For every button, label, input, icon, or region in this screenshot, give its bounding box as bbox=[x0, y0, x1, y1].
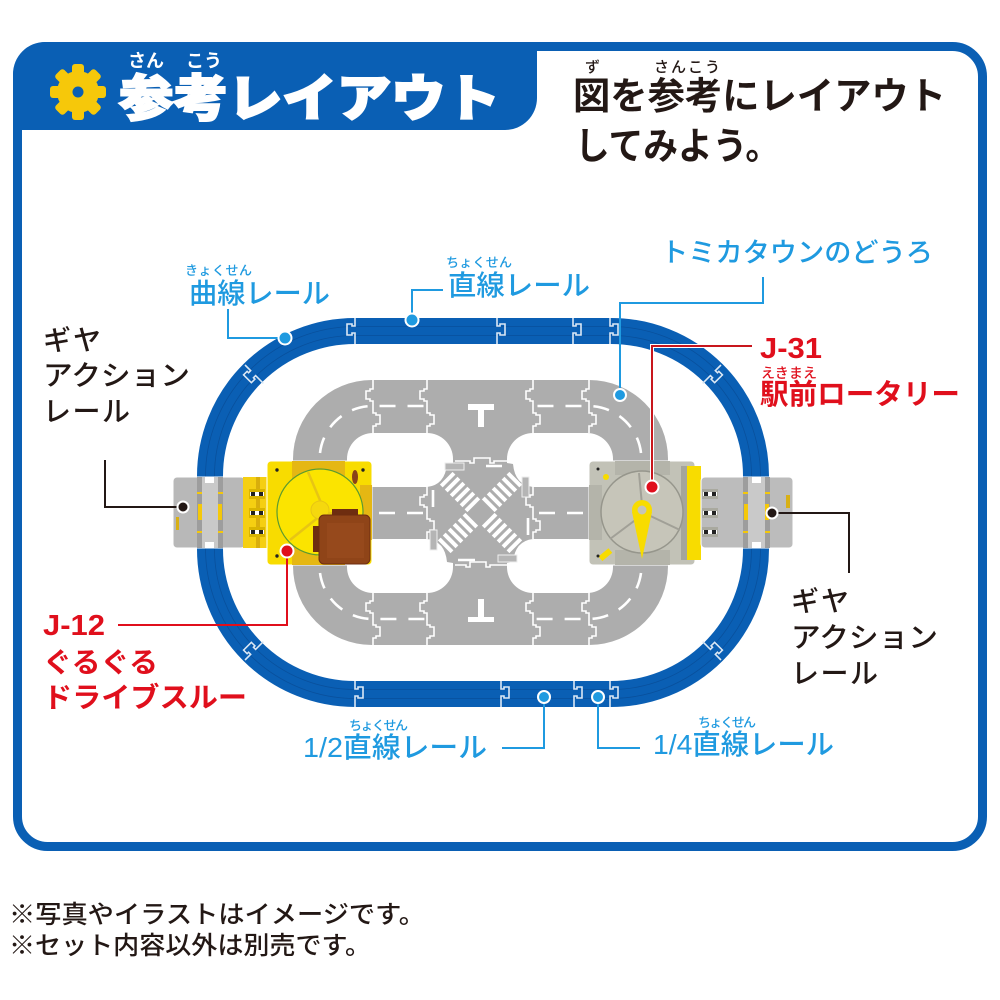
heading ruby bbox=[128, 51, 222, 71]
road seams bbox=[366, 380, 596, 645]
callout: half straight rail bbox=[303, 691, 550, 763]
callout: J-12: ドライブスルー bbox=[43, 681, 247, 713]
intro text: してみよう。 bbox=[575, 125, 780, 167]
intro text: ず bbox=[585, 59, 600, 76]
callout: straight rail: 直線レール bbox=[448, 270, 590, 301]
callout: left gear action rail: アクション bbox=[43, 360, 190, 391]
callout: J-31: 駅前ロータリー bbox=[760, 379, 960, 411]
panel frame bbox=[18, 46, 982, 846]
crosswalks bbox=[438, 472, 522, 553]
left gear action rail bbox=[173, 477, 271, 548]
footnotes: ※写真やイラストはイメージです。 bbox=[9, 901, 425, 929]
callout: straight rail bbox=[406, 255, 590, 326]
callout: half straight rail: ちょくせん bbox=[349, 718, 408, 733]
intro text: さんこう bbox=[654, 59, 720, 76]
callout: left gear action rail: ギヤ bbox=[43, 325, 101, 356]
callout: J-12: ぐるぐる bbox=[43, 647, 158, 678]
intro text bbox=[573, 59, 946, 167]
callout: right gear action rail: レール bbox=[791, 658, 878, 689]
callout: J-31: えきまえ bbox=[761, 365, 817, 381]
callout: Tomica town road bbox=[614, 238, 933, 401]
rail seams bbox=[239, 318, 727, 707]
J-12 drive-through bbox=[267, 461, 372, 565]
traffic signals bbox=[430, 463, 529, 562]
callout: right gear action rail bbox=[766, 508, 938, 689]
callout: curved rail bbox=[185, 263, 330, 344]
callout: curved rail: きょくせん bbox=[185, 263, 252, 278]
callout: left gear action rail bbox=[43, 325, 190, 512]
callout: J-31: J-31 bbox=[760, 333, 822, 365]
heading ruby: こう bbox=[186, 51, 222, 71]
intro text: 図を参考にレイアウト bbox=[573, 75, 946, 117]
brown building bbox=[313, 509, 370, 564]
callout: left gear action rail: レール bbox=[43, 396, 130, 427]
right gear action rail bbox=[701, 477, 793, 548]
callout: J-12: J-12 bbox=[43, 610, 105, 642]
header tab bbox=[13, 42, 537, 137]
footnotes: ※セット内容以外は別売です。 bbox=[9, 932, 371, 960]
icon: gear bbox=[50, 64, 106, 120]
callout: curved rail: 曲線レール bbox=[189, 278, 330, 309]
callout: right gear action rail: アクション bbox=[791, 622, 938, 653]
footnotes bbox=[9, 901, 425, 960]
callout: half straight rail: 1/2直線レール bbox=[303, 732, 487, 763]
callout: Tomica town road: トミカタウンのどうろ bbox=[661, 238, 933, 268]
road dashes bbox=[320, 406, 641, 619]
J-31 station rotary bbox=[589, 461, 701, 565]
road layout bbox=[293, 380, 668, 645]
callout: J-12 bbox=[43, 544, 294, 713]
callout: J-31 bbox=[646, 333, 960, 494]
callout: right gear action rail: ギヤ bbox=[791, 586, 849, 617]
road T marks bbox=[468, 404, 494, 427]
callout: quarter straight rail: 1/4直線レール bbox=[653, 729, 834, 760]
callout: straight rail: ちょくせん bbox=[446, 255, 512, 270]
callout: quarter straight rail: ちょくせん bbox=[698, 715, 756, 730]
rail loop bbox=[206, 318, 760, 707]
callout: quarter straight rail bbox=[592, 691, 834, 760]
heading ruby: さん bbox=[128, 51, 164, 71]
heading: 参考レイアウト bbox=[119, 71, 500, 127]
